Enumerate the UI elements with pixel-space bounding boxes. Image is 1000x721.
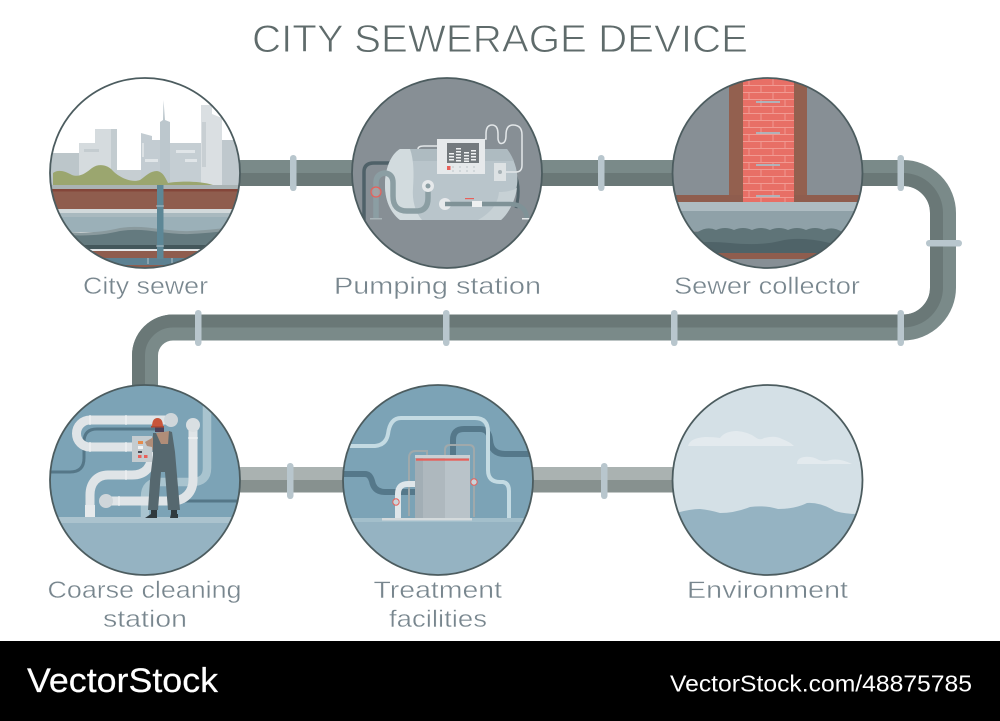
footer: logo text: VectorStock — [27, 662, 219, 700]
sub-element: worker — [145, 418, 180, 518]
panel: pumping station — [352, 78, 542, 268]
title: CITY SEWERAGE DEVICE — [252, 18, 748, 61]
panel: treatment facilities — [335, 385, 541, 577]
label: coarse cleaning station: Coarse cleaning — [48, 577, 242, 604]
pipeline: upper main pipe with bends — [138, 173, 943, 400]
panel: coarse cleaning station — [40, 385, 250, 578]
panel: environment — [672, 385, 862, 580]
label: environment: Environment — [687, 577, 848, 604]
pipeline: lower light pipe — [230, 467, 680, 492]
panel: sewer collector — [670, 75, 866, 271]
label: coarse cleaning station: station — [103, 606, 187, 633]
footer: image id: VectorStock.com/48875785 — [670, 670, 972, 696]
panel: city sewer — [48, 78, 242, 271]
pipe clamps — [195, 155, 962, 499]
label: treatment facilities: Treatment — [374, 577, 502, 604]
label: sewer collector: Sewer collector — [674, 273, 860, 300]
label: pumping station: Pumping station — [334, 273, 541, 300]
sub-element: control box — [132, 436, 152, 462]
label: treatment facilities — [374, 577, 502, 633]
label: city sewer: City sewer — [83, 273, 208, 300]
label: coarse cleaning station — [48, 577, 242, 633]
label: treatment facilities: facilities — [389, 606, 487, 633]
footer band — [0, 641, 1000, 721]
sub-element: tank body — [385, 149, 517, 220]
